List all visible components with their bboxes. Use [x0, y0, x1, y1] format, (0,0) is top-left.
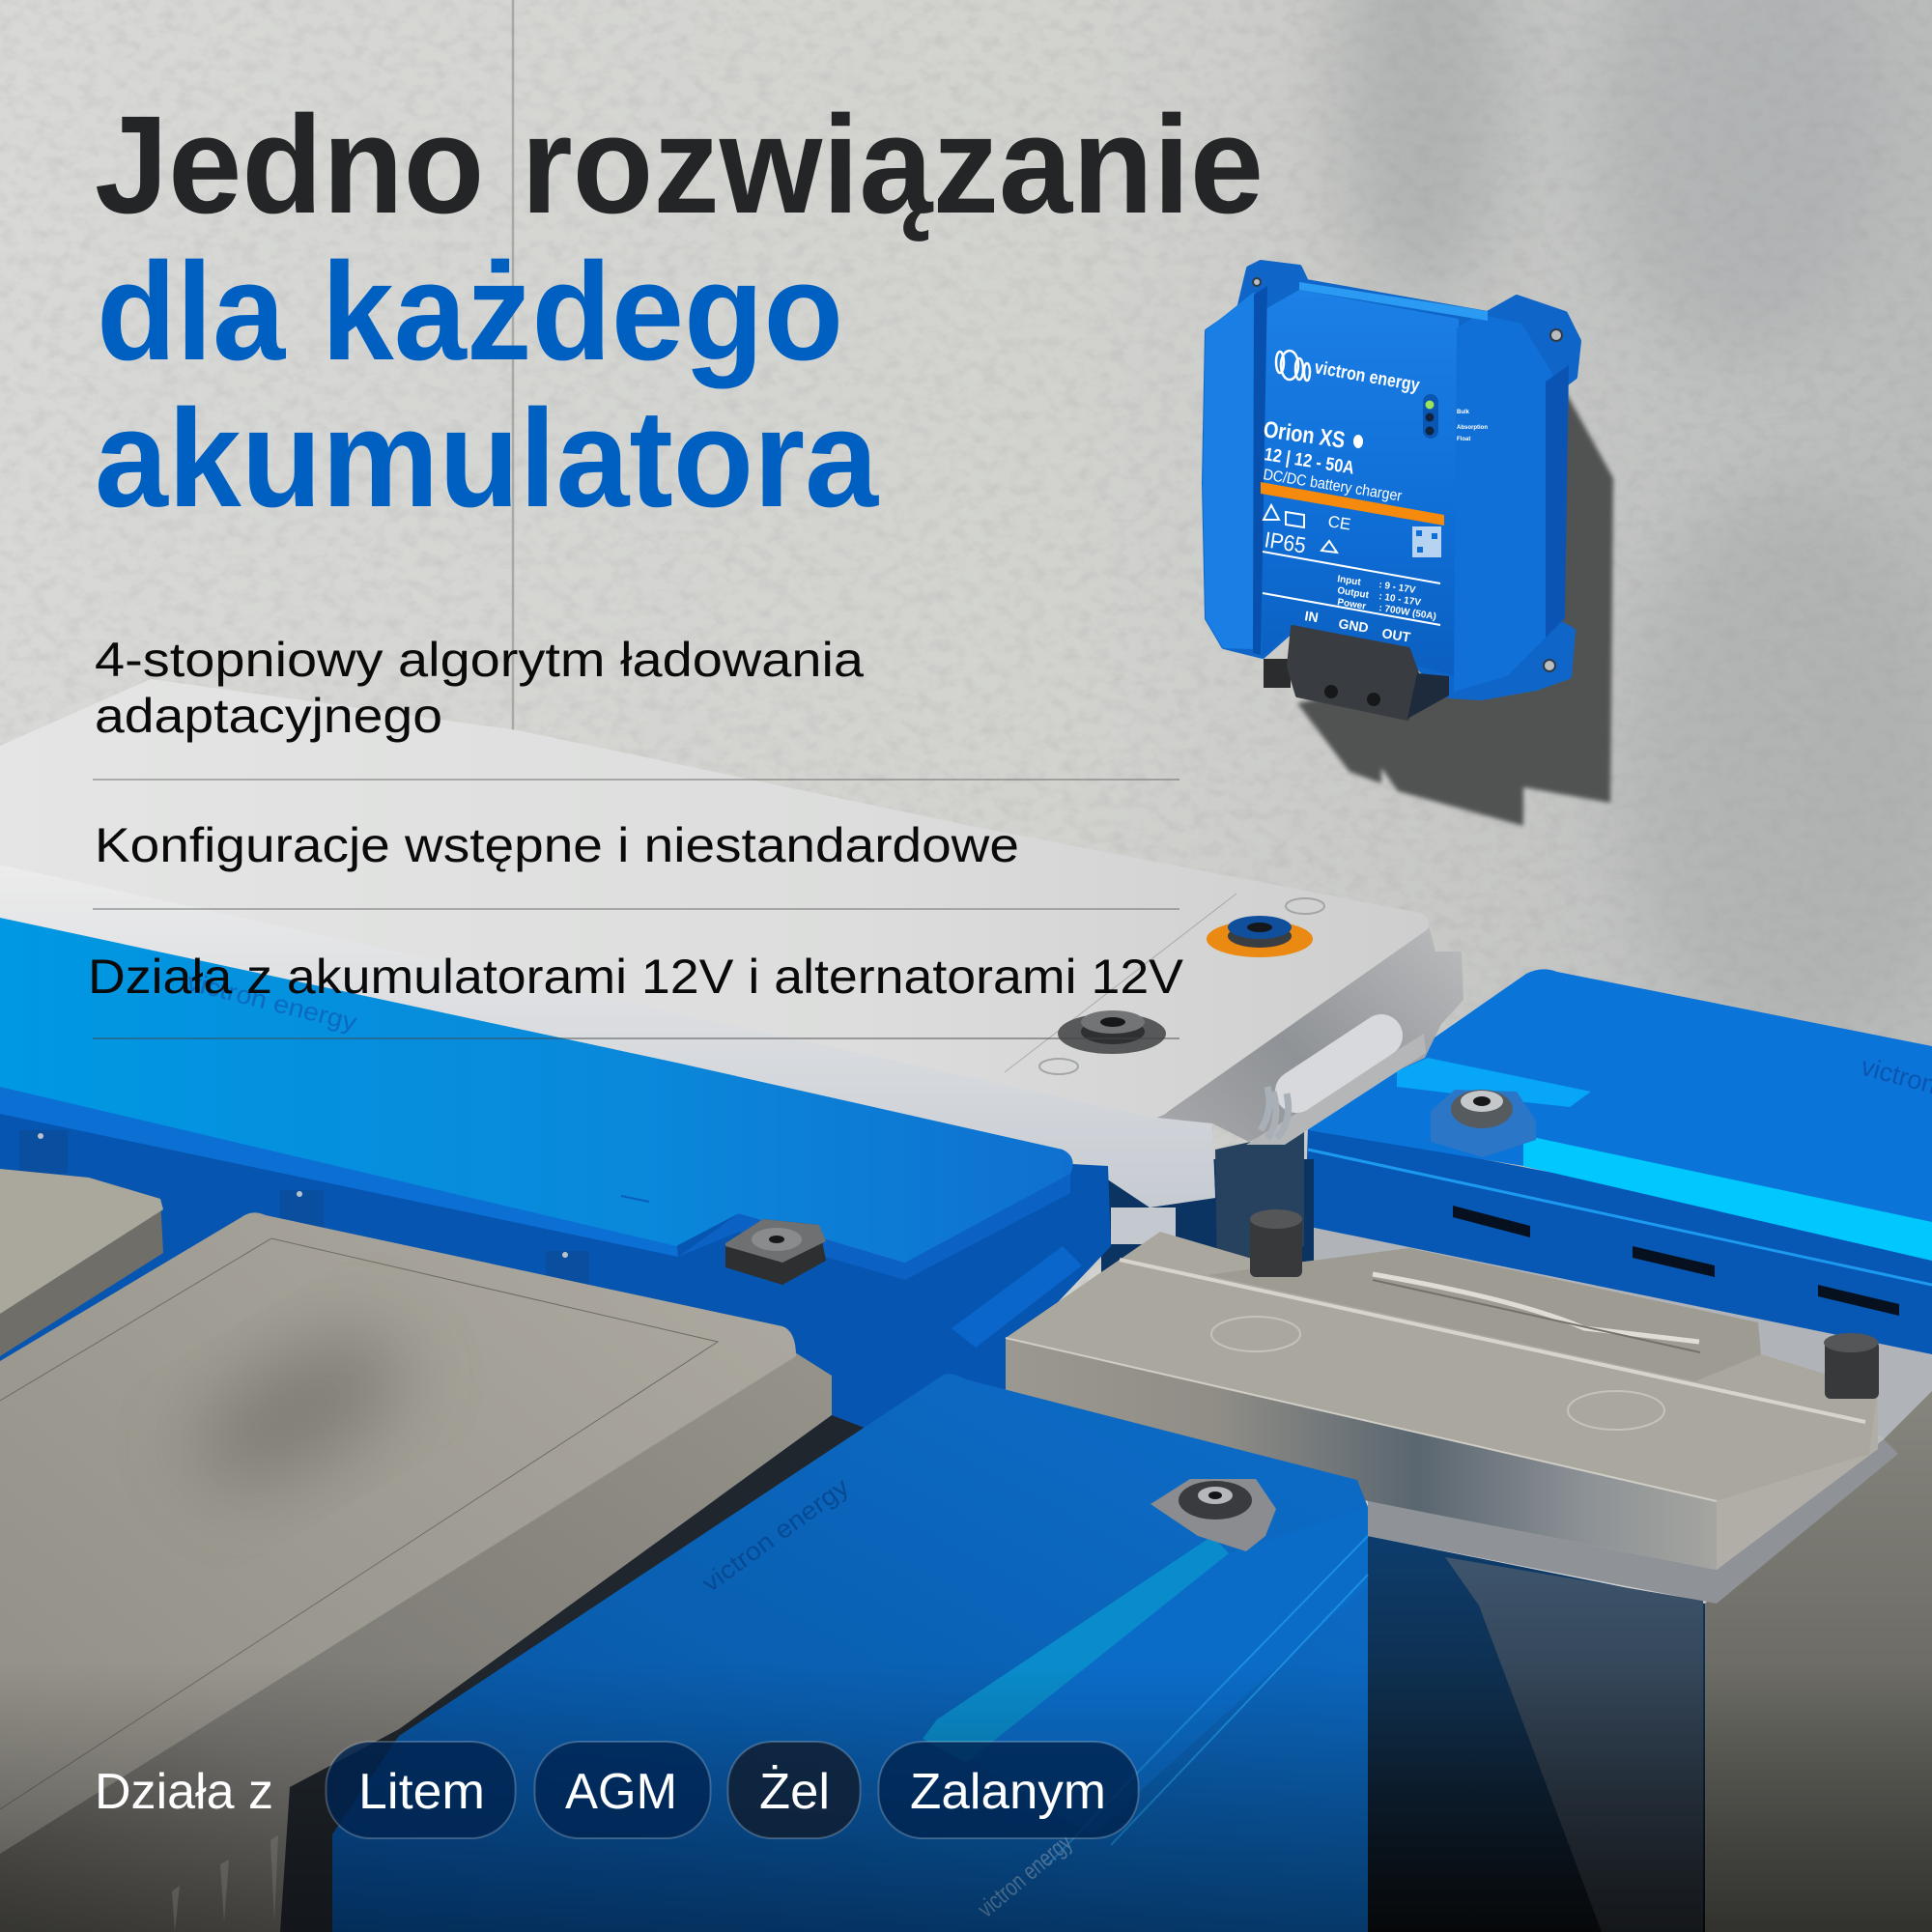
side face — [1150, 923, 1463, 1208]
embossed logo text: victron energy — [696, 1472, 854, 1598]
chip: Zalanym — [879, 1742, 1138, 1838]
battery: gray, small left — [0, 1169, 163, 1356]
battery: gray, large left — [0, 1212, 869, 1932]
top surface — [1308, 969, 1932, 1261]
safety icons — [1264, 505, 1337, 553]
label text: Orion XS — [1262, 416, 1347, 454]
victron logo mark — [1276, 351, 1310, 381]
title: Jedno rozwiązanie — [95, 87, 1264, 242]
title: akumulatora — [95, 381, 879, 536]
victron logo text: victron energy — [185, 967, 359, 1037]
body — [332, 1374, 1368, 1932]
label text: IN — [1304, 608, 1320, 625]
front band — [0, 865, 1215, 1208]
right bracket — [1546, 365, 1569, 638]
label text: DC/DC battery charger — [1262, 467, 1404, 505]
post right — [1824, 1333, 1879, 1399]
pale surface beyond — [1285, 1198, 1932, 1449]
mounting screws — [1253, 278, 1562, 671]
device body — [1205, 263, 1578, 697]
right face — [1705, 1391, 1932, 1932]
device front panel — [1263, 290, 1459, 676]
chip: AGM: AGM — [565, 1764, 677, 1820]
leg — [1111, 1208, 1176, 1244]
battery types row — [95, 1742, 1138, 1838]
flange — [1368, 1439, 1898, 1604]
label text: IP65 — [1263, 526, 1308, 558]
title: dla każdego — [97, 234, 843, 389]
polarity marks — [1039, 898, 1324, 1074]
lid front face — [1006, 1338, 1717, 1570]
feature: adaptive charging: 4-stopniowy algorytm ładowania — [95, 633, 864, 687]
label text: Absorption — [1457, 425, 1488, 431]
terminal — [1431, 1090, 1536, 1157]
panel edge lines — [1048, 1536, 1368, 1864]
label text: : 700W (50A) — [1378, 603, 1437, 622]
device right section — [1454, 314, 1557, 692]
body side — [1305, 1125, 1932, 1354]
terminal block — [1264, 659, 1291, 688]
label text: Power — [1337, 597, 1367, 612]
cable holder — [1246, 1034, 1426, 1145]
label text: Float — [1457, 437, 1470, 442]
label text: victron energy — [1313, 357, 1421, 396]
chip: AGM — [535, 1742, 711, 1838]
battery: white, long — [0, 679, 1463, 1352]
chip: Zalanym: Zalanym — [910, 1764, 1106, 1820]
negative terminal — [1058, 1010, 1166, 1054]
label text: Bulk — [1457, 410, 1470, 415]
chip: Litem — [327, 1742, 516, 1838]
orange stripe — [1261, 482, 1444, 526]
charger: Orion XS device — [1205, 263, 1578, 719]
slots — [1453, 1206, 1899, 1316]
label text: : 10 - 17V — [1378, 591, 1422, 609]
post left — [1250, 1209, 1302, 1277]
terminal — [725, 1219, 826, 1285]
feature: voltage: Działa z akumulatorami 12V i alternatorami 12V — [88, 950, 1184, 1004]
lid right lip — [678, 1174, 1070, 1280]
lid top surface — [0, 918, 1073, 1263]
lower logo text: victron energy — [973, 1829, 1078, 1923]
lid top surface — [1006, 1232, 1878, 1501]
groove — [1253, 286, 1267, 655]
side bracket — [952, 1246, 1082, 1348]
body side — [0, 1087, 1111, 1507]
positive terminal — [1207, 916, 1313, 957]
black connector cover — [1289, 627, 1449, 719]
feature: configurations: Konfiguracje wstępne i niestandardowe — [95, 818, 1019, 872]
label text: CE — [1326, 512, 1352, 534]
label text: Output — [1337, 585, 1370, 601]
lit wedge on front face — [1445, 1557, 1703, 1932]
device left end — [1205, 295, 1254, 647]
shadow blotch — [173, 1306, 426, 1515]
label text: GND — [1338, 615, 1370, 636]
inset line — [1005, 894, 1236, 1072]
edge line — [1308, 1150, 1932, 1285]
lid lip — [0, 1087, 678, 1257]
QR code — [1412, 526, 1441, 557]
feature: adaptive charging — [95, 633, 864, 743]
label text — [1262, 357, 1488, 645]
dark gap below — [1101, 1159, 1314, 1352]
battery: blue, back right — [1285, 969, 1932, 1449]
background: concrete wall — [0, 0, 1932, 1449]
pale ridge line — [1120, 1260, 1865, 1422]
chip: Żel — [728, 1742, 860, 1838]
inset line — [0, 1238, 718, 1809]
cable — [1261, 1036, 1381, 1138]
handle — [1373, 1274, 1699, 1342]
lower front face — [1368, 1536, 1705, 1932]
bluetooth badge — [1353, 435, 1363, 448]
lid side — [1717, 1391, 1878, 1570]
dark lower part — [280, 1415, 869, 1932]
feature: adaptive charging: adaptacyjnego — [95, 689, 442, 743]
lid mark — [621, 1196, 649, 1202]
lid discs — [1211, 1317, 1664, 1430]
label: works with: Działa z — [95, 1764, 273, 1820]
chip: Litem: Litem — [358, 1764, 485, 1820]
cyan strip, front — [1523, 1135, 1932, 1261]
cyan strip, back — [1397, 1058, 1591, 1107]
raised handle block — [1208, 1248, 1761, 1381]
label text: OUT — [1381, 625, 1412, 645]
title — [95, 87, 1264, 536]
top highlight — [1299, 282, 1488, 321]
ribs — [172, 1835, 278, 1932]
bright lid strip — [923, 1536, 1229, 1763]
battery: blue, long — [0, 918, 1111, 1507]
top surface — [0, 679, 1429, 1118]
top surface — [0, 1212, 796, 1854]
chip: Żel: Żel — [759, 1764, 830, 1820]
battery: gray, back right — [1006, 1209, 1932, 1932]
screw lugs — [19, 1130, 589, 1294]
terminal — [1151, 1479, 1276, 1551]
front lower panel — [937, 1507, 1368, 1835]
body side — [0, 1348, 832, 1932]
white rule lines — [1263, 552, 1440, 625]
battery: blue, front centre — [332, 1374, 1368, 1932]
feature list — [88, 633, 1184, 1038]
shadow of charger on wall — [1297, 379, 1613, 826]
bottom vignette — [0, 1662, 1932, 1932]
status LEDs — [1423, 394, 1438, 439]
label text: Input — [1337, 574, 1362, 588]
label text: : 9 - 17V — [1378, 580, 1416, 596]
label text: 12 | 12 - 50A — [1263, 444, 1356, 479]
